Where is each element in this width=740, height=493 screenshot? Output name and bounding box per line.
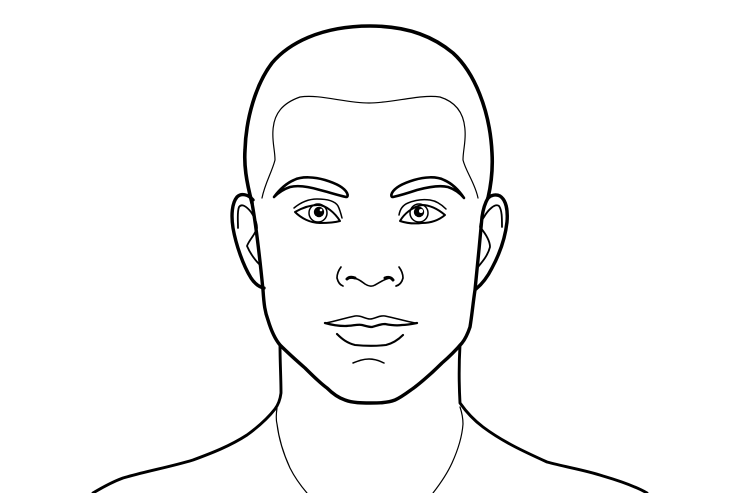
right eyebrow [391,177,464,198]
nose [337,267,403,286]
neck: left side and shoulder [93,345,281,493]
right eye [399,200,446,223]
left ear [232,195,264,288]
left eye [294,199,342,223]
hairline [262,96,478,198]
left eyebrow [274,177,348,197]
right ear [476,195,507,289]
chin crease [353,359,384,363]
neck: right side and shoulder [459,345,647,493]
face: jaw and chin outline [252,198,488,403]
head: skull outline [245,26,492,203]
neck: right collar line [433,407,463,493]
mouth [325,316,417,346]
neck: left collar line [276,408,307,493]
